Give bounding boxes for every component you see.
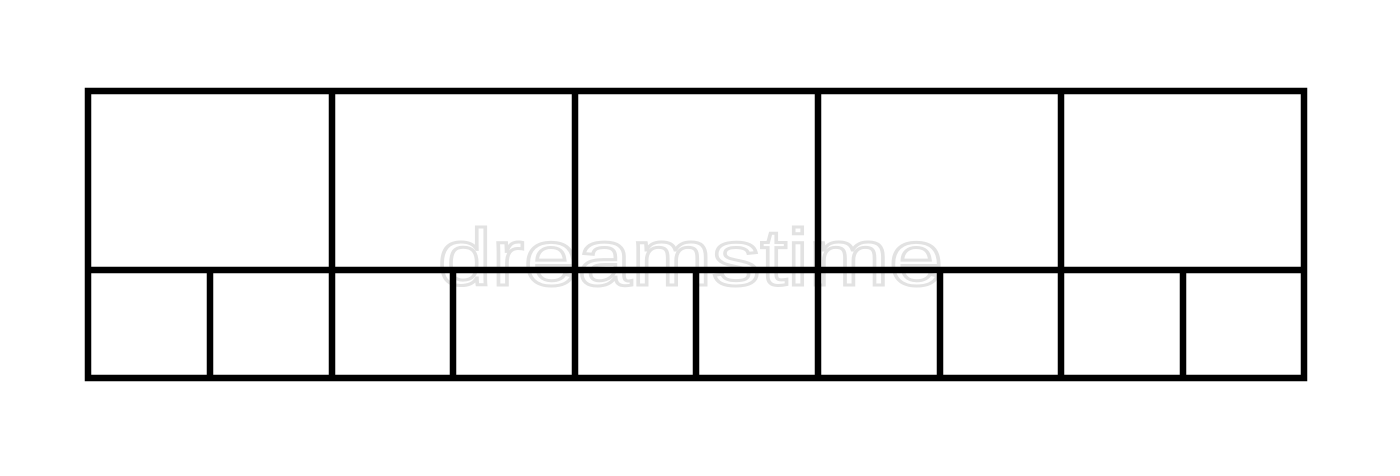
outer frame — [88, 91, 1304, 378]
large column dividers — [329, 91, 335, 378]
horizontal divider — [88, 267, 1304, 273]
watermark: dreamstime — [438, 213, 943, 302]
small cell dividers — [207, 270, 213, 378]
